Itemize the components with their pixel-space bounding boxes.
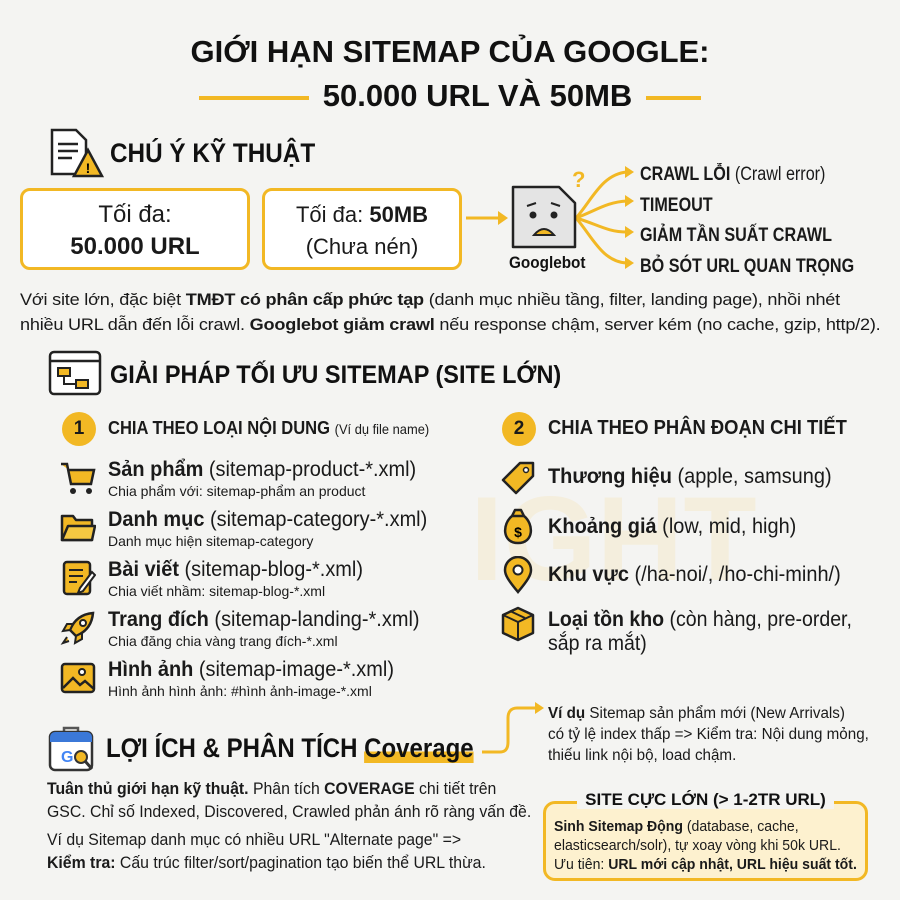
list: crawl problems: CRAWL LỖI (Crawl error) bbox=[640, 164, 825, 185]
column 1: content type: CHIA THEO LOẠI NỘI DUNG (Ví dụ file name) bbox=[108, 418, 429, 438]
item: khoảng giá bbox=[504, 508, 796, 544]
item: hình ảnh: Hình ảnh (sitemap-image-*.xml) bbox=[108, 658, 394, 681]
icon: document warning bbox=[50, 128, 104, 178]
box: 50mb: Tối đa: 50MB bbox=[296, 202, 428, 227]
item: hình ảnh bbox=[60, 658, 394, 699]
item: loại tồn kho: sắp ra mắt) bbox=[548, 632, 647, 655]
list: crawl problems bbox=[640, 163, 854, 276]
list: crawl problems: BỎ SÓT URL QUAN TRỌNG bbox=[640, 256, 854, 276]
arrows: googlebot bbox=[466, 166, 634, 269]
item: thương hiệu: Thương hiệu (apple, samsung) bbox=[548, 465, 832, 488]
heading: lợi ích & coverage: LỢI ÍCH & PHÂN TÍCH Coverage bbox=[106, 733, 474, 763]
icon: google search console bbox=[48, 726, 94, 772]
text: SITE CỰC LỚN (> 1-2TR URL) bbox=[585, 790, 826, 809]
callout box: site cực lớn: Sinh Sitemap Động (database, cache, bbox=[554, 819, 799, 835]
item: trang đích: Trang đích (sitemap-landing-*.xml) bbox=[108, 608, 420, 631]
paragraph: coverage analysis: GSC. Chỉ số Indexed, Discovered, Crawled phản ánh rõ ràng vấn đề. bbox=[47, 802, 531, 821]
box: 50000 url: Tối đa: bbox=[98, 201, 172, 228]
item: sản phẩm: Chia phẩm với: sitemap-phẩm an product bbox=[108, 483, 365, 499]
item: hình ảnh: Hình ảnh hình ảnh: #hình ảnh-image-*.xml bbox=[108, 683, 372, 699]
paragraph: technical note bbox=[20, 290, 880, 334]
watermark: IGHT bbox=[470, 472, 757, 606]
item: khu vực bbox=[504, 556, 841, 594]
item: khoảng giá: Khoảng giá (low, mid, high) bbox=[548, 515, 796, 538]
item: khoảng giá: $ bbox=[514, 524, 522, 540]
callout box: site cực lớn bbox=[543, 801, 868, 881]
paragraph: technical note: nhiều URL dẫn đến lỗi crawl. Googlebot giảm crawl nếu response chậm, server kém (no cache, gzip, http/2). bbox=[20, 315, 880, 334]
column 2: segments bbox=[502, 412, 852, 655]
item: sản phẩm: Sản phẩm (sitemap-product-*.xml) bbox=[108, 458, 416, 481]
callout: new arrivals example: thiếu link nội bộ, load chậm. bbox=[548, 747, 736, 764]
item: loại tồn kho bbox=[502, 606, 852, 655]
icon: googlebot bbox=[512, 167, 585, 248]
list: crawl problems: TIMEOUT bbox=[640, 194, 713, 216]
heading: chú ý kỹ thuật: CHÚ Ý KỸ THUẬT bbox=[110, 138, 315, 168]
box: 50000 url: 50.000 URL bbox=[70, 233, 200, 260]
title: GIỚI HẠN SITEMAP CỦA GOOGLE: bbox=[190, 34, 710, 69]
box: 50mb bbox=[262, 188, 462, 270]
paragraph: coverage analysis: Ví dụ Sitemap danh mục có nhiều URL "Alternate page" => bbox=[47, 830, 461, 849]
box: 50mb: (Chưa nén) bbox=[306, 234, 418, 259]
box: 50000 url bbox=[20, 188, 250, 270]
item: thương hiệu bbox=[502, 462, 832, 494]
item: bài viết: Bài viết (sitemap-blog-*.xml) bbox=[108, 558, 363, 581]
badge 1 bbox=[62, 412, 96, 446]
column 1: content type bbox=[60, 412, 429, 699]
title bbox=[190, 34, 710, 113]
icon: document warning: ! bbox=[86, 160, 90, 176]
item: bài viết bbox=[62, 558, 363, 599]
paragraph: coverage analysis: Tuân thủ giới hạn kỹ thuật. Phân tích COVERAGE chi tiết trên bbox=[47, 779, 496, 798]
badge 2 bbox=[502, 412, 536, 446]
item: sản phẩm bbox=[61, 458, 416, 499]
item: khu vực: Khu vực (/ha-noi/, /ho-chi-minh/) bbox=[548, 563, 841, 586]
badge 2: 2 bbox=[514, 418, 524, 439]
callout: new arrivals example bbox=[548, 705, 869, 764]
item: loại tồn kho: Loại tồn kho (còn hàng, pre-order, bbox=[548, 608, 852, 631]
icon: googlebot: ? bbox=[572, 167, 585, 192]
heading: giải pháp: GIẢI PHÁP TỐI ƯU SITEMAP (SITE LỚN) bbox=[110, 361, 561, 389]
list: crawl problems: GIẢM TẦN SUẤT CRAWL bbox=[640, 225, 832, 246]
callout: new arrivals example: có tỷ lệ index thấp => Kiểm tra: Nội dung mỏng, bbox=[548, 726, 869, 743]
item: danh mục: Danh mục (sitemap-category-*.xml) bbox=[108, 508, 427, 531]
title: 50.000 URL VÀ 50MB bbox=[323, 78, 632, 113]
callout box: site cực lớn: elasticsearch/solr), tự xoay vòng khi 50k URL. bbox=[554, 838, 841, 854]
callout: new arrivals example: Ví dụ Sitemap sản phẩm mới (New Arrivals) bbox=[548, 705, 845, 722]
paragraph: technical note: Với site lớn, đặc biệt TMĐT có phân cấp phức tạp (danh mục nhiều tầng, filter, landing page), nhồi nhét bbox=[20, 290, 840, 309]
item: bài viết: Chia viết nhầm: sitemap-blog-*.xml bbox=[108, 583, 325, 599]
item: danh mục bbox=[60, 508, 427, 549]
item: danh mục: Danh mục hiện sitemap-category bbox=[108, 533, 313, 549]
label: googlebot: Googlebot bbox=[509, 253, 585, 272]
badge 1: 1 bbox=[74, 418, 84, 439]
paragraph: coverage analysis bbox=[47, 779, 531, 872]
icon: sitemap window bbox=[48, 350, 102, 396]
column 2: segments: CHIA THEO PHÂN ĐOẠN CHI TIẾT bbox=[548, 417, 847, 439]
item: trang đích bbox=[60, 608, 420, 649]
callout box: site cực lớn: Ưu tiên: URL mới cập nhật, URL hiệu suất tốt. bbox=[554, 857, 857, 873]
paragraph: coverage analysis: Kiểm tra: Cấu trúc filter/sort/pagination tạo biến thể URL thừa. bbox=[47, 853, 486, 872]
item: trang đích: Chia đăng chia vàng trang đích-*.xml bbox=[108, 633, 338, 649]
icon: google search console: G bbox=[61, 749, 73, 766]
arrow: coverage to example bbox=[482, 702, 544, 754]
